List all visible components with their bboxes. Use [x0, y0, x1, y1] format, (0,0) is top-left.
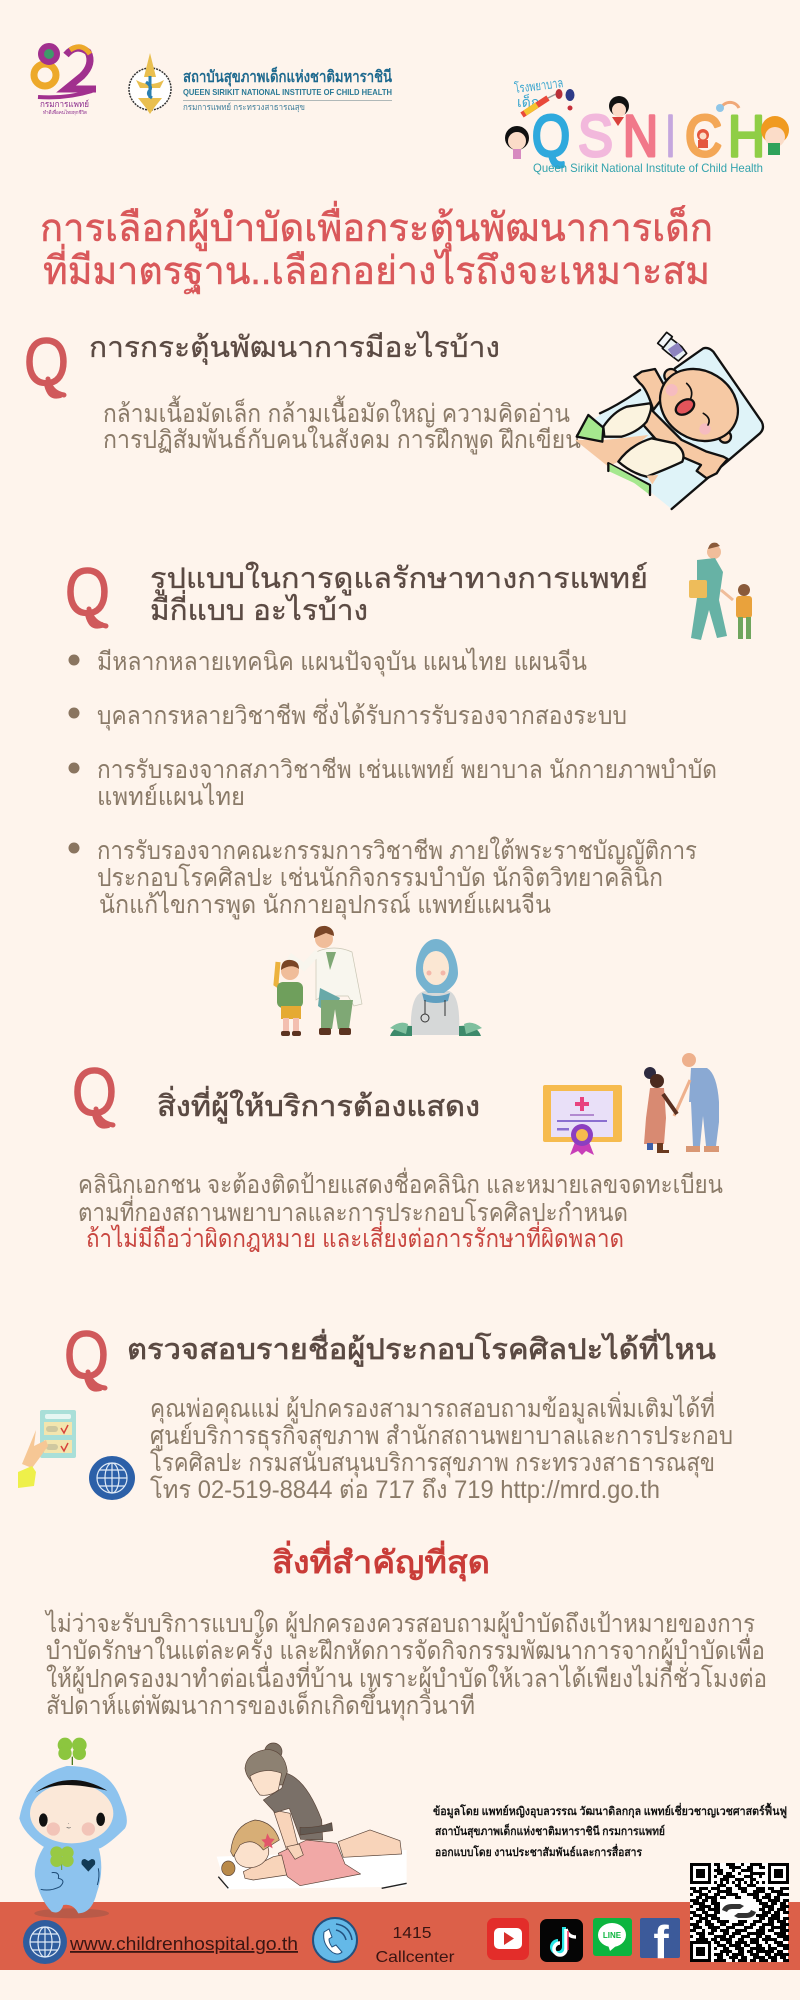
logo: QSNICH children's hospital: โรงพยาบาล [514, 75, 564, 96]
heading: the most important thing: สิ่งที่สำคัญที่สุด [272, 1540, 490, 1582]
logo: QSNICH children's hospital: C [685, 104, 722, 169]
heading [150, 561, 648, 627]
letter Q badge: Q [64, 1318, 109, 1393]
text block: closing advice: สัปดาห์แต่พัฒนาการของเด็กเกิดขึ้นทุกวินาที [46, 1687, 475, 1721]
heading: ตรวจสอบรายชื่อผู้ประกอบโรคศิลปะได้ที่ไหน [127, 1329, 716, 1367]
letter Q badge: Q [65, 555, 110, 630]
body text: โรคศิลปะ กรมสนับสนุนบริการสุขภาพ กระทรวงสาธารณสุข [150, 1448, 715, 1478]
logo: QSNICH children's hospital: H [728, 104, 765, 169]
panel: what stimulation covers [24, 325, 581, 455]
call center number [376, 1925, 455, 1966]
logo: Queen Sirikit National Institute of Child Health emblem and name: สถาบันสุขภาพเด็กแห่งชาติมหาราชินี [183, 65, 392, 87]
body text [103, 395, 581, 455]
body text: การปฏิสัมพันธ์กับคนในสังคม การฝึกพูด ฝึกเขียน [103, 425, 581, 455]
heading: มีกี่แบบ อะไรบ้าง [150, 590, 368, 627]
icon: YouTube [487, 1918, 529, 1960]
credits text: สถาบันสุขภาพเด็กแห่งชาติมหาราชินี กรมการแพทย์ [435, 1823, 665, 1839]
body text: ศูนย์บริการธุรกิจสุขภาพ สำนักสถานพยาบาลและการประกอบ [150, 1422, 733, 1451]
body text: คลินิกเอกชน จะต้องติดป้ายแสดงชื่อคลินิก และหมายเลขจดทะเบียน [78, 1167, 723, 1199]
bullet list [68, 647, 717, 920]
QR code [690, 1863, 789, 1962]
illustration: nurse in hijab [390, 939, 482, 1036]
bullet list: การรับรองจากสภาวิชาชีพ เช่นแพทย์ พยาบาล นักกายภาพบำบัด [97, 756, 717, 784]
body text: ถ้าไม่มีถือว่าผิดกฎหมาย และเสี่ยงต่อการรักษาที่ผิดพลาด [86, 1221, 624, 1253]
letter Q badge: Q [24, 325, 69, 400]
bullet list: การรับรองจากคณะกรรมการวิชาชีพ ภายใต้พระราชบัญญัติการ [97, 836, 697, 865]
body text [78, 1167, 723, 1253]
panel: where to check the list of practitioners [64, 1318, 733, 1504]
bullet list: มีหลากหลายเทคนิค แผนปัจจุบัน แผนไทย แผนจีน [97, 647, 587, 677]
illustration: blue mascot with clover [19, 1738, 127, 1918]
bullet list: ประกอบโรคศิลปะ เช่นนักกิจกรรมบำบัด นักจิตวิทยาคลินิก [97, 863, 663, 892]
body text: กล้ามเนื้อมัดเล็ก กล้ามเนื้อมัดใหญ่ ความคิดอ่าน [103, 395, 570, 428]
body text: ตามที่กองสถานพยาบาลและการประกอบโรคศิลปะกำหนด [78, 1195, 628, 1227]
body text [150, 1391, 733, 1504]
website link: www.childrenhospital.go.th [69, 1934, 298, 1954]
heading: การกระตุ้นพัฒนาการมีอะไรบ้าง [89, 330, 500, 365]
letter Q badge: Q [72, 1055, 117, 1130]
logo: QSNICH children's hospital: S [578, 104, 613, 169]
icon: globe [89, 1456, 135, 1500]
logo: QSNICH children's hospital: I [666, 104, 675, 169]
title: ที่มีมาตรฐาน..เลือกอย่างไรถึงจะเหมาะสม [43, 244, 710, 294]
logo: QSNICH children's hospital: N [623, 104, 658, 169]
icon: website globe [23, 1920, 67, 1964]
illustration: therapist massaging girl [217, 1743, 407, 1889]
logo: Queen Sirikit National Institute of Child Health emblem and name: กรมการแพทย์ กระทรวงสาธารณสุข [183, 102, 305, 113]
illustration: baby being massaged [575, 332, 763, 509]
bullet list: แพทย์แผนไทย [97, 782, 245, 811]
credits text: ออกแบบโดย งานประชาสัมพันธ์และการสื่อสาร [435, 1843, 643, 1859]
logo: QSNICH children's hospital [505, 75, 789, 175]
icon: TikTok [540, 1919, 583, 1962]
title: การเลือกผู้บำบัดเพื่อกระตุ้นพัฒนาการเด็ก [40, 201, 713, 252]
icon: Facebook: f [653, 1916, 669, 1968]
illustration: nurse walking with child [689, 543, 752, 640]
icon: LINE [593, 1918, 632, 1956]
bullet list: บุคลากรหลายวิชาชีพ ซึ่งได้รับการรับรองจากสองระบบ [97, 698, 627, 731]
illustration: doctor measuring child [276, 926, 362, 1036]
call center number: 1415 [392, 1925, 432, 1942]
icon: Facebook [640, 1916, 680, 1968]
bullet list: นักแก้ไขการพูด นักกายอุปกรณ์ แพทย์แผนจีน [99, 890, 551, 920]
icon: phone [313, 1918, 357, 1962]
logo: 82 years department of medical services: ทำดีเพื่อคนไทยทุกชีวิต [43, 109, 87, 116]
text block: closing advice [44, 1609, 767, 1721]
credits text [433, 1802, 787, 1859]
body text: โทร 02-519-8844 ต่อ 717 ถึง 719 http://mrd.go.th [150, 1475, 660, 1504]
logo: QSNICH children's hospital: เด็ก [517, 93, 539, 110]
icon: checklist on phone in hand [18, 1410, 76, 1488]
heading: รูปแบบในการดูแลรักษาทางการแพทย์ [150, 561, 648, 596]
logo: 82 years department of medical services: กรมการแพทย์ [40, 99, 89, 109]
icon: certificate [543, 1085, 622, 1155]
logo: QSNICH children's hospital: Queen Sirikit National Institute of Child Health [533, 161, 763, 175]
title [40, 201, 713, 294]
logo: Queen Sirikit National Institute of Child Health emblem and name [129, 53, 392, 114]
call center number: Callcenter [376, 1949, 455, 1966]
panel: what providers must display [72, 1055, 723, 1253]
footer banner [0, 1902, 800, 1970]
logo: QSNICH children's hospital: Q [532, 104, 570, 169]
logo: Queen Sirikit National Institute of Child Health emblem and name: QUEEN SIRIKIT NATIONAL INSTITUTE OF CHILD HEALTH [183, 87, 392, 97]
logo: 82 years department of medical services [34, 46, 96, 116]
heading: สิ่งที่ผู้ให้บริการต้องแสดง [157, 1086, 480, 1124]
panel: types of medical care [65, 555, 717, 920]
illustration: nurse helping child patient [644, 1053, 719, 1153]
icon: LINE: LINE [603, 1931, 622, 1940]
body text: คุณพ่อคุณแม่ ผู้ปกครองสามารถสอบถามข้อมูลเพิ่มเติมได้ที่ [150, 1391, 715, 1424]
